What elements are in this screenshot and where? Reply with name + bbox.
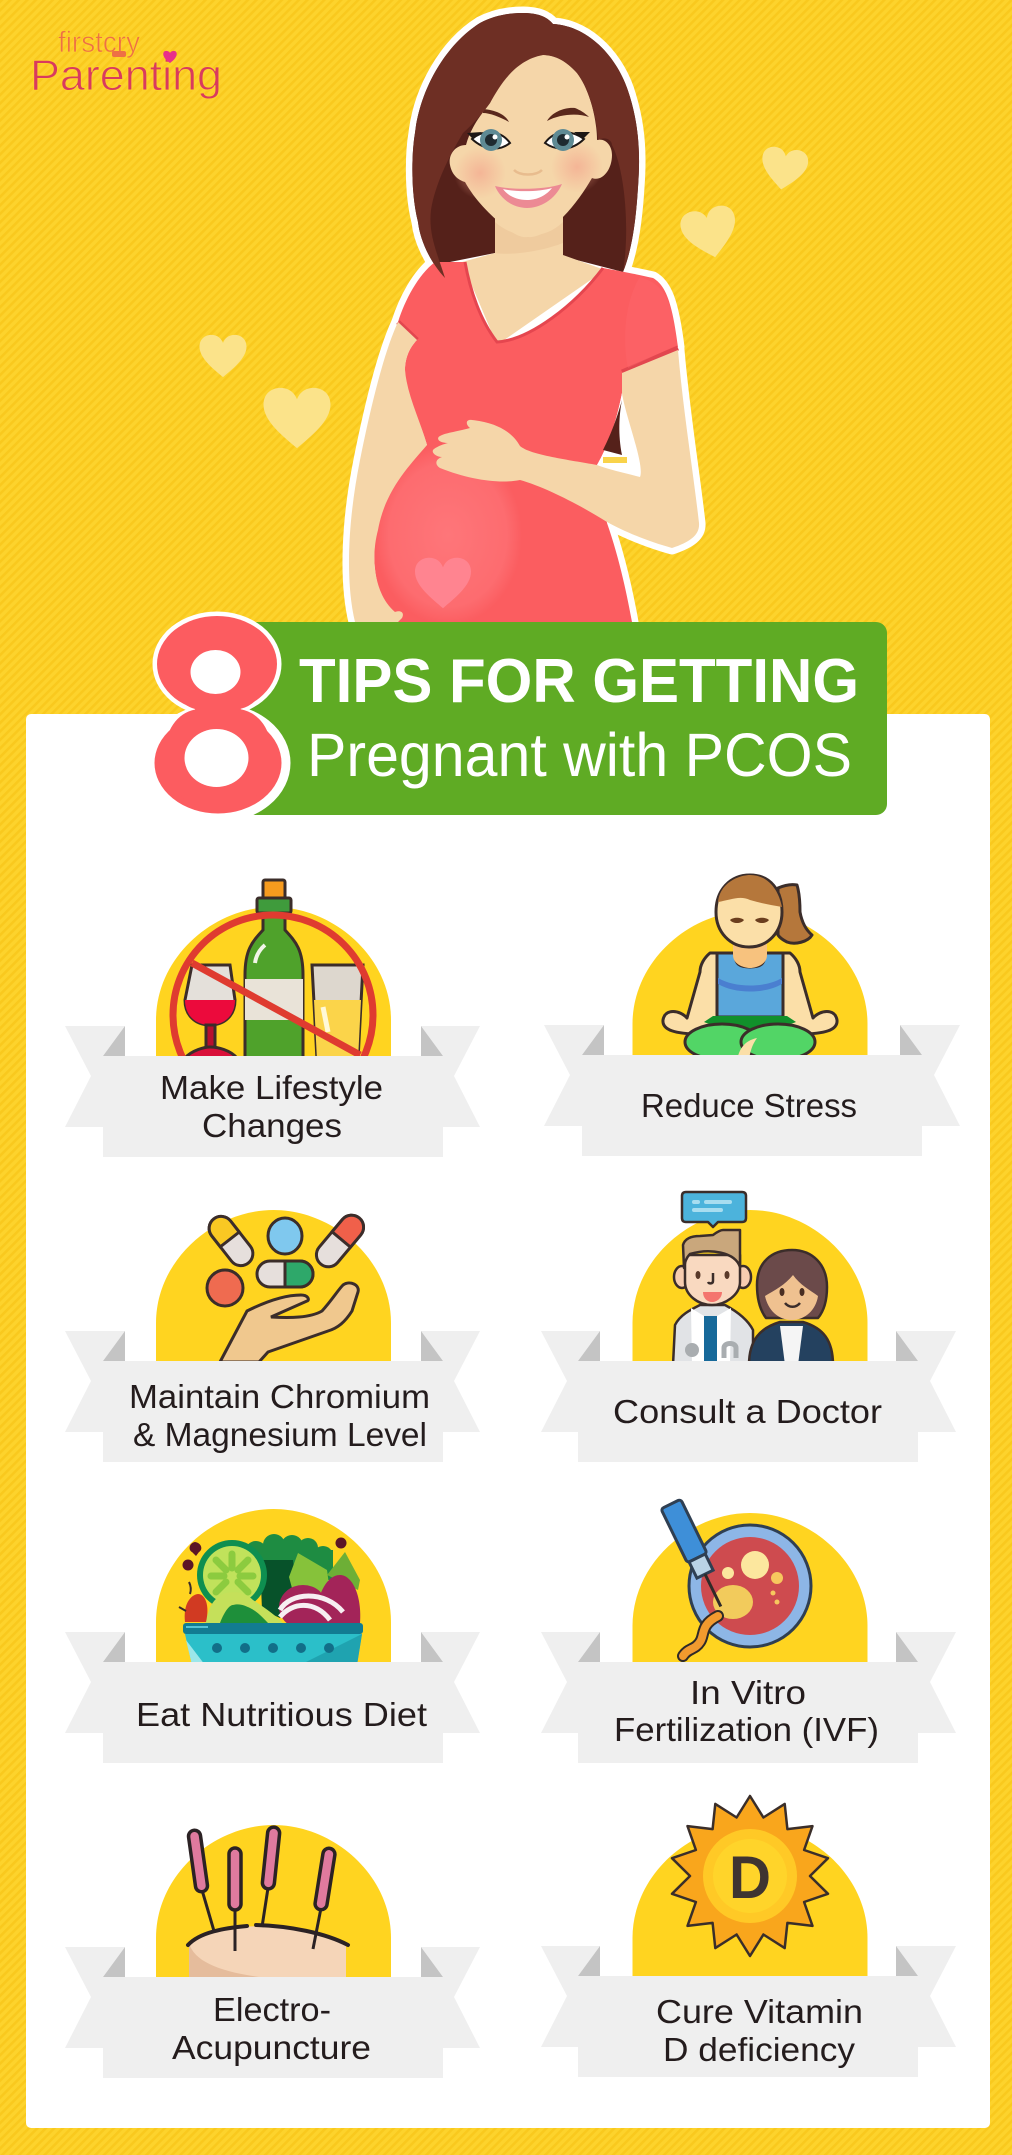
yellow oval	[156, 1825, 391, 1995]
illustration: pregnant woman	[349, 13, 699, 625]
label	[129, 1378, 430, 1453]
ribbon	[65, 1632, 480, 1763]
icon: no alcohol	[173, 880, 373, 1115]
ribbon	[65, 1026, 480, 1157]
ribbon	[544, 1025, 960, 1156]
hearts in background	[200, 145, 810, 448]
label: Acupuncture	[172, 2029, 371, 2066]
label: & Magnesium Level	[133, 1416, 427, 1453]
label: Make Lifestyle	[160, 1069, 383, 1106]
back hair	[412, 13, 639, 278]
label	[160, 1069, 383, 1144]
label: Cure Vitamin	[656, 1993, 863, 2030]
ribbon	[541, 1632, 956, 1763]
logo: FirstCry Parenting: Parenting	[30, 51, 222, 100]
ribbon	[541, 1331, 956, 1462]
label: Fertilization (IVF)	[614, 1711, 879, 1748]
label: Consult a Doctor	[613, 1393, 882, 1430]
ribbon	[541, 1946, 956, 2077]
card: Reduce Stress	[544, 875, 960, 1156]
title line 1: TIPS FOR GETTING	[299, 647, 859, 716]
logo: FirstCry Parenting: firstcry	[58, 26, 140, 59]
green title box	[240, 622, 887, 815]
card: Make Lifestyle Changes	[65, 880, 480, 1157]
ribbon	[65, 1947, 480, 2078]
yellow oval	[156, 907, 391, 1077]
smile	[495, 184, 562, 208]
icon: pills and hand	[204, 1210, 368, 1362]
yellow oval	[632, 1210, 868, 1380]
belly heart	[415, 558, 471, 608]
title line 2: Pregnant with PCOS	[307, 721, 852, 789]
yellow oval	[632, 911, 868, 1081]
label: In Vitro	[690, 1674, 806, 1711]
icon: salad bowl	[179, 1534, 363, 1665]
icon: vitamin D sun	[672, 1796, 828, 1956]
label: D deficiency	[663, 2031, 856, 2068]
card: Cure Vitamin D deficiency	[541, 1796, 956, 2077]
title banner	[150, 563, 887, 863]
left arm	[349, 322, 427, 622]
numeral 8: 8	[158, 563, 278, 863]
eyes and brows	[483, 109, 509, 122]
card: Eat Nutritious Diet	[65, 1509, 480, 1763]
icon: vitamin D sun: D	[729, 1844, 771, 1911]
label: Electro-	[213, 1991, 331, 2028]
icon: acupuncture needles	[188, 1827, 348, 1985]
ribbon	[65, 1331, 480, 1462]
yellow oval	[632, 1513, 868, 1683]
neck	[462, 205, 605, 345]
face	[450, 55, 612, 237]
label: Changes	[202, 1107, 342, 1144]
gap with hair tip behind arm	[597, 393, 640, 477]
label: Reduce Stress	[641, 1087, 857, 1124]
label: Maintain Chromium	[129, 1378, 430, 1415]
label	[172, 1991, 371, 2066]
card: Electro-Acupuncture	[65, 1825, 480, 2078]
white content panel	[26, 714, 990, 2128]
label	[656, 1993, 863, 2068]
card: Consult a Doctor	[541, 1192, 956, 1462]
label: Eat Nutritious Diet	[136, 1696, 427, 1733]
yellow oval	[156, 1210, 391, 1380]
label	[614, 1674, 879, 1748]
icon: meditating woman	[663, 875, 837, 1060]
front hair	[412, 13, 639, 278]
dress	[374, 262, 678, 622]
logo: FirstCry Parenting	[30, 26, 222, 100]
yellow oval	[156, 1509, 391, 1679]
icon: doctor and patient	[673, 1192, 833, 1365]
card: In Vitro Fertilization (IVF)	[541, 1499, 956, 1763]
icon: IVF dish and syringe	[661, 1499, 811, 1656]
yellow oval	[632, 1825, 868, 1995]
right arm and hand	[433, 350, 699, 548]
card: Maintain Chromium & Magnesium Level	[65, 1210, 480, 1462]
